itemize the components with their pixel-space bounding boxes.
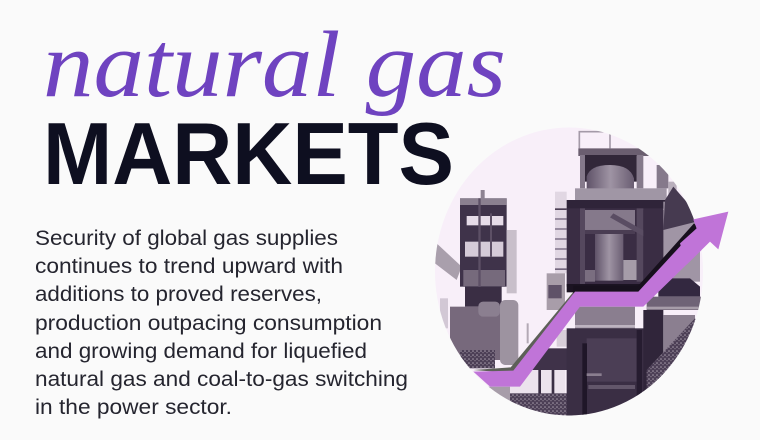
purple growth arrow xyxy=(474,219,702,387)
background stair lattice xyxy=(510,192,573,417)
intro paragraph: continues to trend upward with xyxy=(35,254,343,278)
intro paragraph: additions to proved reserves, xyxy=(35,282,322,306)
intro paragraph: production outpacing consumption xyxy=(35,311,382,335)
title: natural gas: natural gas xyxy=(43,13,506,117)
left tower lattice xyxy=(460,190,517,293)
intro paragraph: and growing demand for liquefied xyxy=(35,339,367,363)
intro paragraph: in the power sector. xyxy=(35,395,232,419)
photo circle: refinery towers xyxy=(435,128,703,416)
arrow shadow xyxy=(473,223,698,373)
intro paragraph: Security of global gas supplies xyxy=(35,226,338,250)
heading: MARKETS: MARKETS xyxy=(43,104,454,203)
left lower tank xyxy=(440,286,518,401)
intro paragraph xyxy=(35,226,408,419)
right tanks and platform xyxy=(643,165,701,392)
central tower xyxy=(567,132,667,417)
intro paragraph: natural gas and coal-to-gas switching xyxy=(35,367,408,391)
left diagonal pipe xyxy=(435,243,462,280)
arrow head outside circle xyxy=(680,212,728,265)
